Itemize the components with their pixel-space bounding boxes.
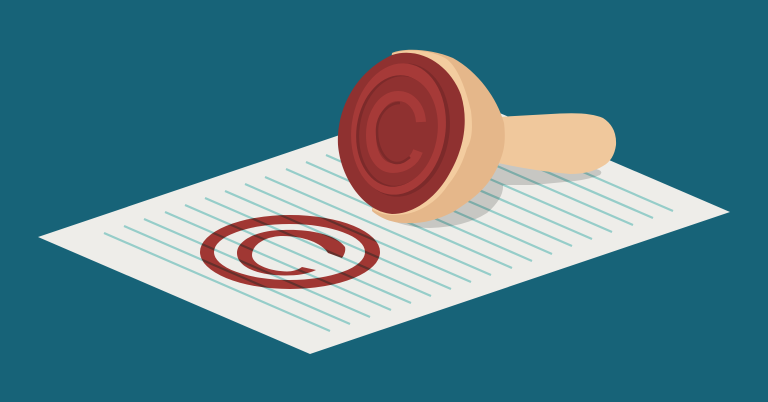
stamp face	[338, 53, 465, 214]
groove inner crescent	[349, 70, 444, 192]
letter C groove	[377, 103, 410, 163]
stamp shadow	[390, 163, 601, 228]
printed letter C	[237, 230, 345, 276]
ring centre	[352, 71, 445, 191]
stamp rim	[373, 51, 472, 215]
raised letter C	[371, 96, 421, 168]
printed copyright mark	[200, 215, 380, 289]
groove outer crescent	[345, 57, 458, 203]
rubber stamp	[338, 50, 616, 223]
stamp body	[372, 50, 505, 223]
raised ring	[343, 57, 454, 201]
paper document	[38, 95, 730, 354]
stamp handle	[498, 113, 616, 174]
text lines on document	[104, 113, 673, 331]
printed mark outer ring	[200, 215, 380, 289]
